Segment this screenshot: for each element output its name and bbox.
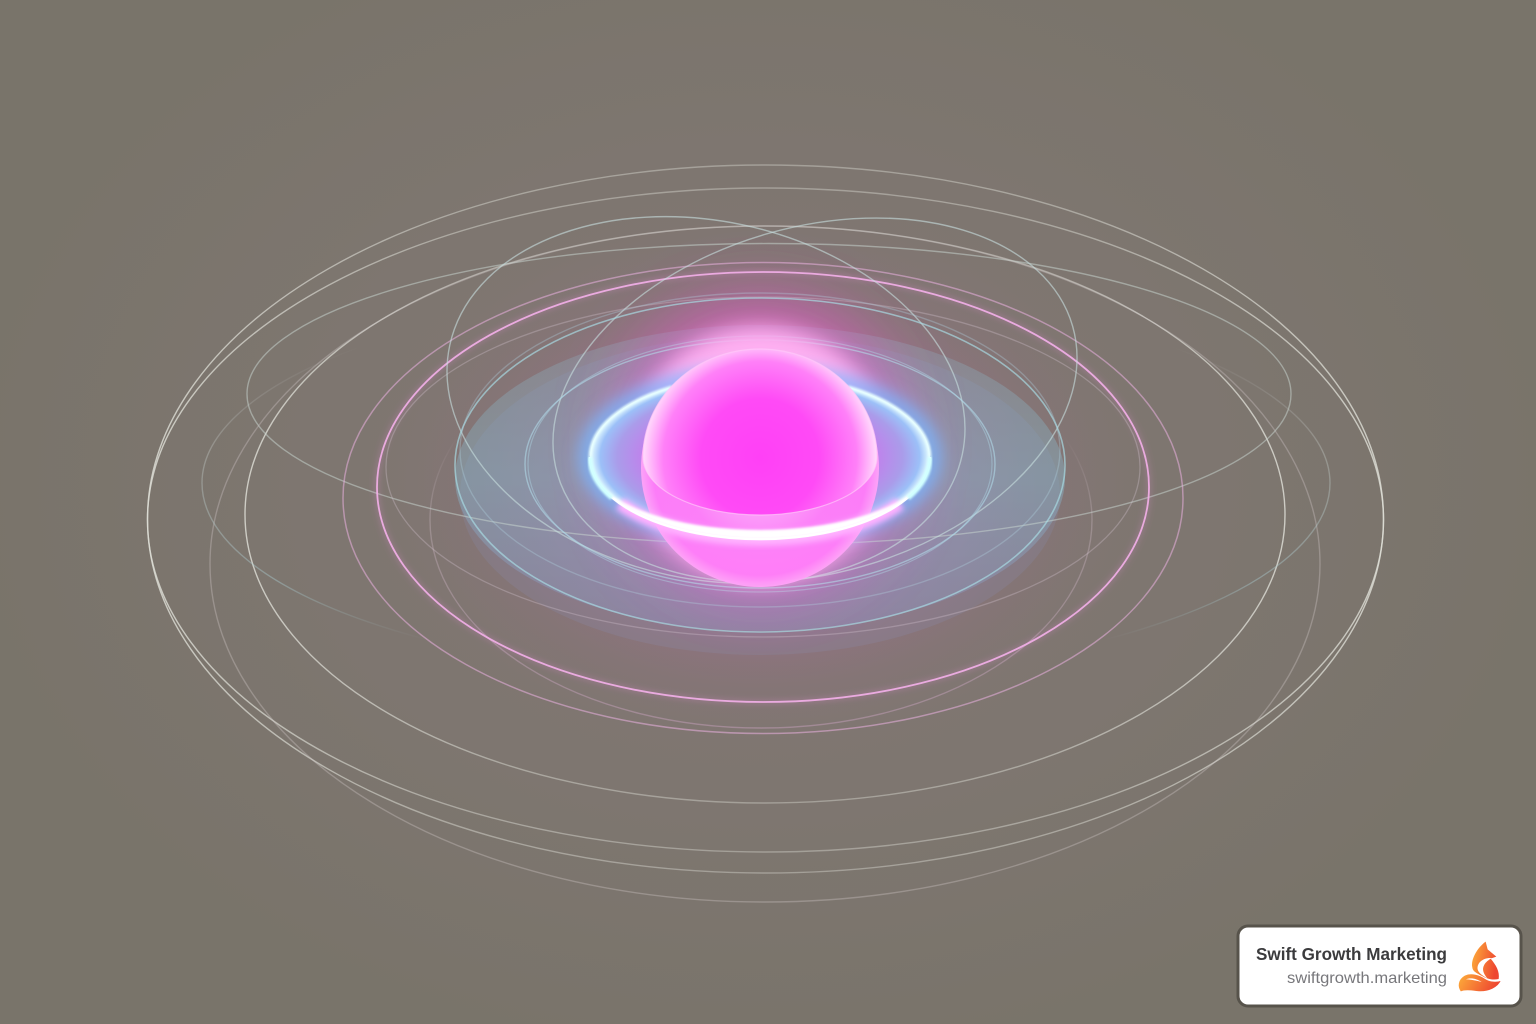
sphere glow bbox=[632, 327, 888, 583]
pink orbit rings bbox=[343, 262, 1183, 734]
teal inner rings bbox=[455, 293, 1065, 632]
central magenta glow bbox=[615, 295, 905, 595]
badge url: swiftgrowth.marketing bbox=[1287, 970, 1447, 987]
outer orbit rings bbox=[148, 165, 1384, 902]
logo badge bbox=[1238, 926, 1521, 1006]
tilted orbit rings bbox=[413, 160, 1120, 640]
icon: fox bbox=[1458, 942, 1502, 992]
badge title: Swift Growth Marketing bbox=[1256, 944, 1447, 964]
magenta ambient glow bbox=[390, 215, 1130, 745]
sphere front hemisphere bbox=[643, 349, 877, 515]
saturn ring glow and fill bbox=[587, 373, 933, 541]
translucent disc bbox=[455, 325, 1065, 655]
bright ring front arc bbox=[590, 387, 930, 539]
sphere lower body bbox=[641, 349, 879, 587]
